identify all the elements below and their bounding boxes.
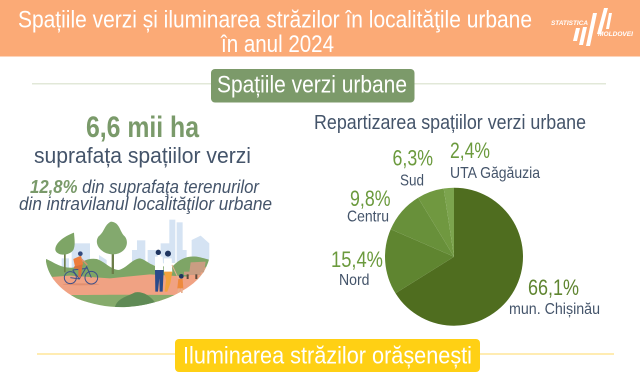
share note xyxy=(19,177,272,214)
key figure caption: suprafața spațiilor verzi xyxy=(34,143,251,168)
tree left xyxy=(55,233,75,272)
icon: park illustration xyxy=(46,220,210,312)
section heading: green spaces xyxy=(32,69,606,102)
family xyxy=(155,250,184,293)
panel: total green area xyxy=(19,111,272,214)
key figure: 6,6 mii ha xyxy=(86,111,199,144)
share note: 12,8% din suprafaţa terenurilor xyxy=(30,177,260,197)
label: mun. Chișinău: mun. Chișinău xyxy=(509,301,600,318)
label: UTA Găgăuzia: 2,4% xyxy=(450,138,490,163)
logo: Statistica Moldovei: MOLDOVEI xyxy=(598,31,633,38)
label: UTA Găgăuzia: UTA Găgăuzia xyxy=(450,165,540,182)
bench xyxy=(184,262,206,279)
label: Nord: Nord xyxy=(339,272,370,289)
pie chart xyxy=(385,188,523,326)
title xyxy=(18,6,532,58)
section heading: green spaces: Spațiile verzi urbane xyxy=(217,72,407,98)
chart title: Repartizarea spațiilor verzi urbane xyxy=(314,112,586,134)
logo: Statistica Moldovei xyxy=(551,8,633,46)
ground path xyxy=(52,266,206,302)
clipped scenery xyxy=(46,220,210,312)
section heading: street lighting xyxy=(37,339,614,372)
cyclist xyxy=(63,251,99,285)
label: Sud xyxy=(392,146,433,190)
section heading: street lighting: Iluminarea străzilor orășenești xyxy=(183,342,472,370)
label: UTA Găgăuzia xyxy=(450,138,540,182)
tree centre xyxy=(97,222,127,274)
label: Centru xyxy=(347,186,390,226)
label: Nord: 15,4% xyxy=(331,247,383,272)
city skyline xyxy=(62,220,209,272)
logo: Statistica Moldovei: STATISTICA xyxy=(551,20,588,27)
foreground grass xyxy=(71,294,174,308)
share note: din intravilanul localităţilor urbane xyxy=(19,194,272,214)
header band xyxy=(0,0,640,58)
panel: distribution of urban green spaces xyxy=(314,112,600,326)
label: Centru: 9,8% xyxy=(350,186,390,211)
label: mun. Chișinău: 66,1% xyxy=(528,275,579,300)
label: Centru: Centru xyxy=(347,208,389,226)
label: mun. Chișinău xyxy=(509,275,600,318)
label: Sud: Sud xyxy=(400,172,424,190)
label: Sud: 6,3% xyxy=(392,146,433,170)
label: Nord xyxy=(331,247,383,289)
background hills xyxy=(46,256,210,280)
title: Spațiile verzi și iluminarea străzilor în localităţile urbane xyxy=(18,6,532,34)
title: în anul 2024 xyxy=(220,31,334,58)
